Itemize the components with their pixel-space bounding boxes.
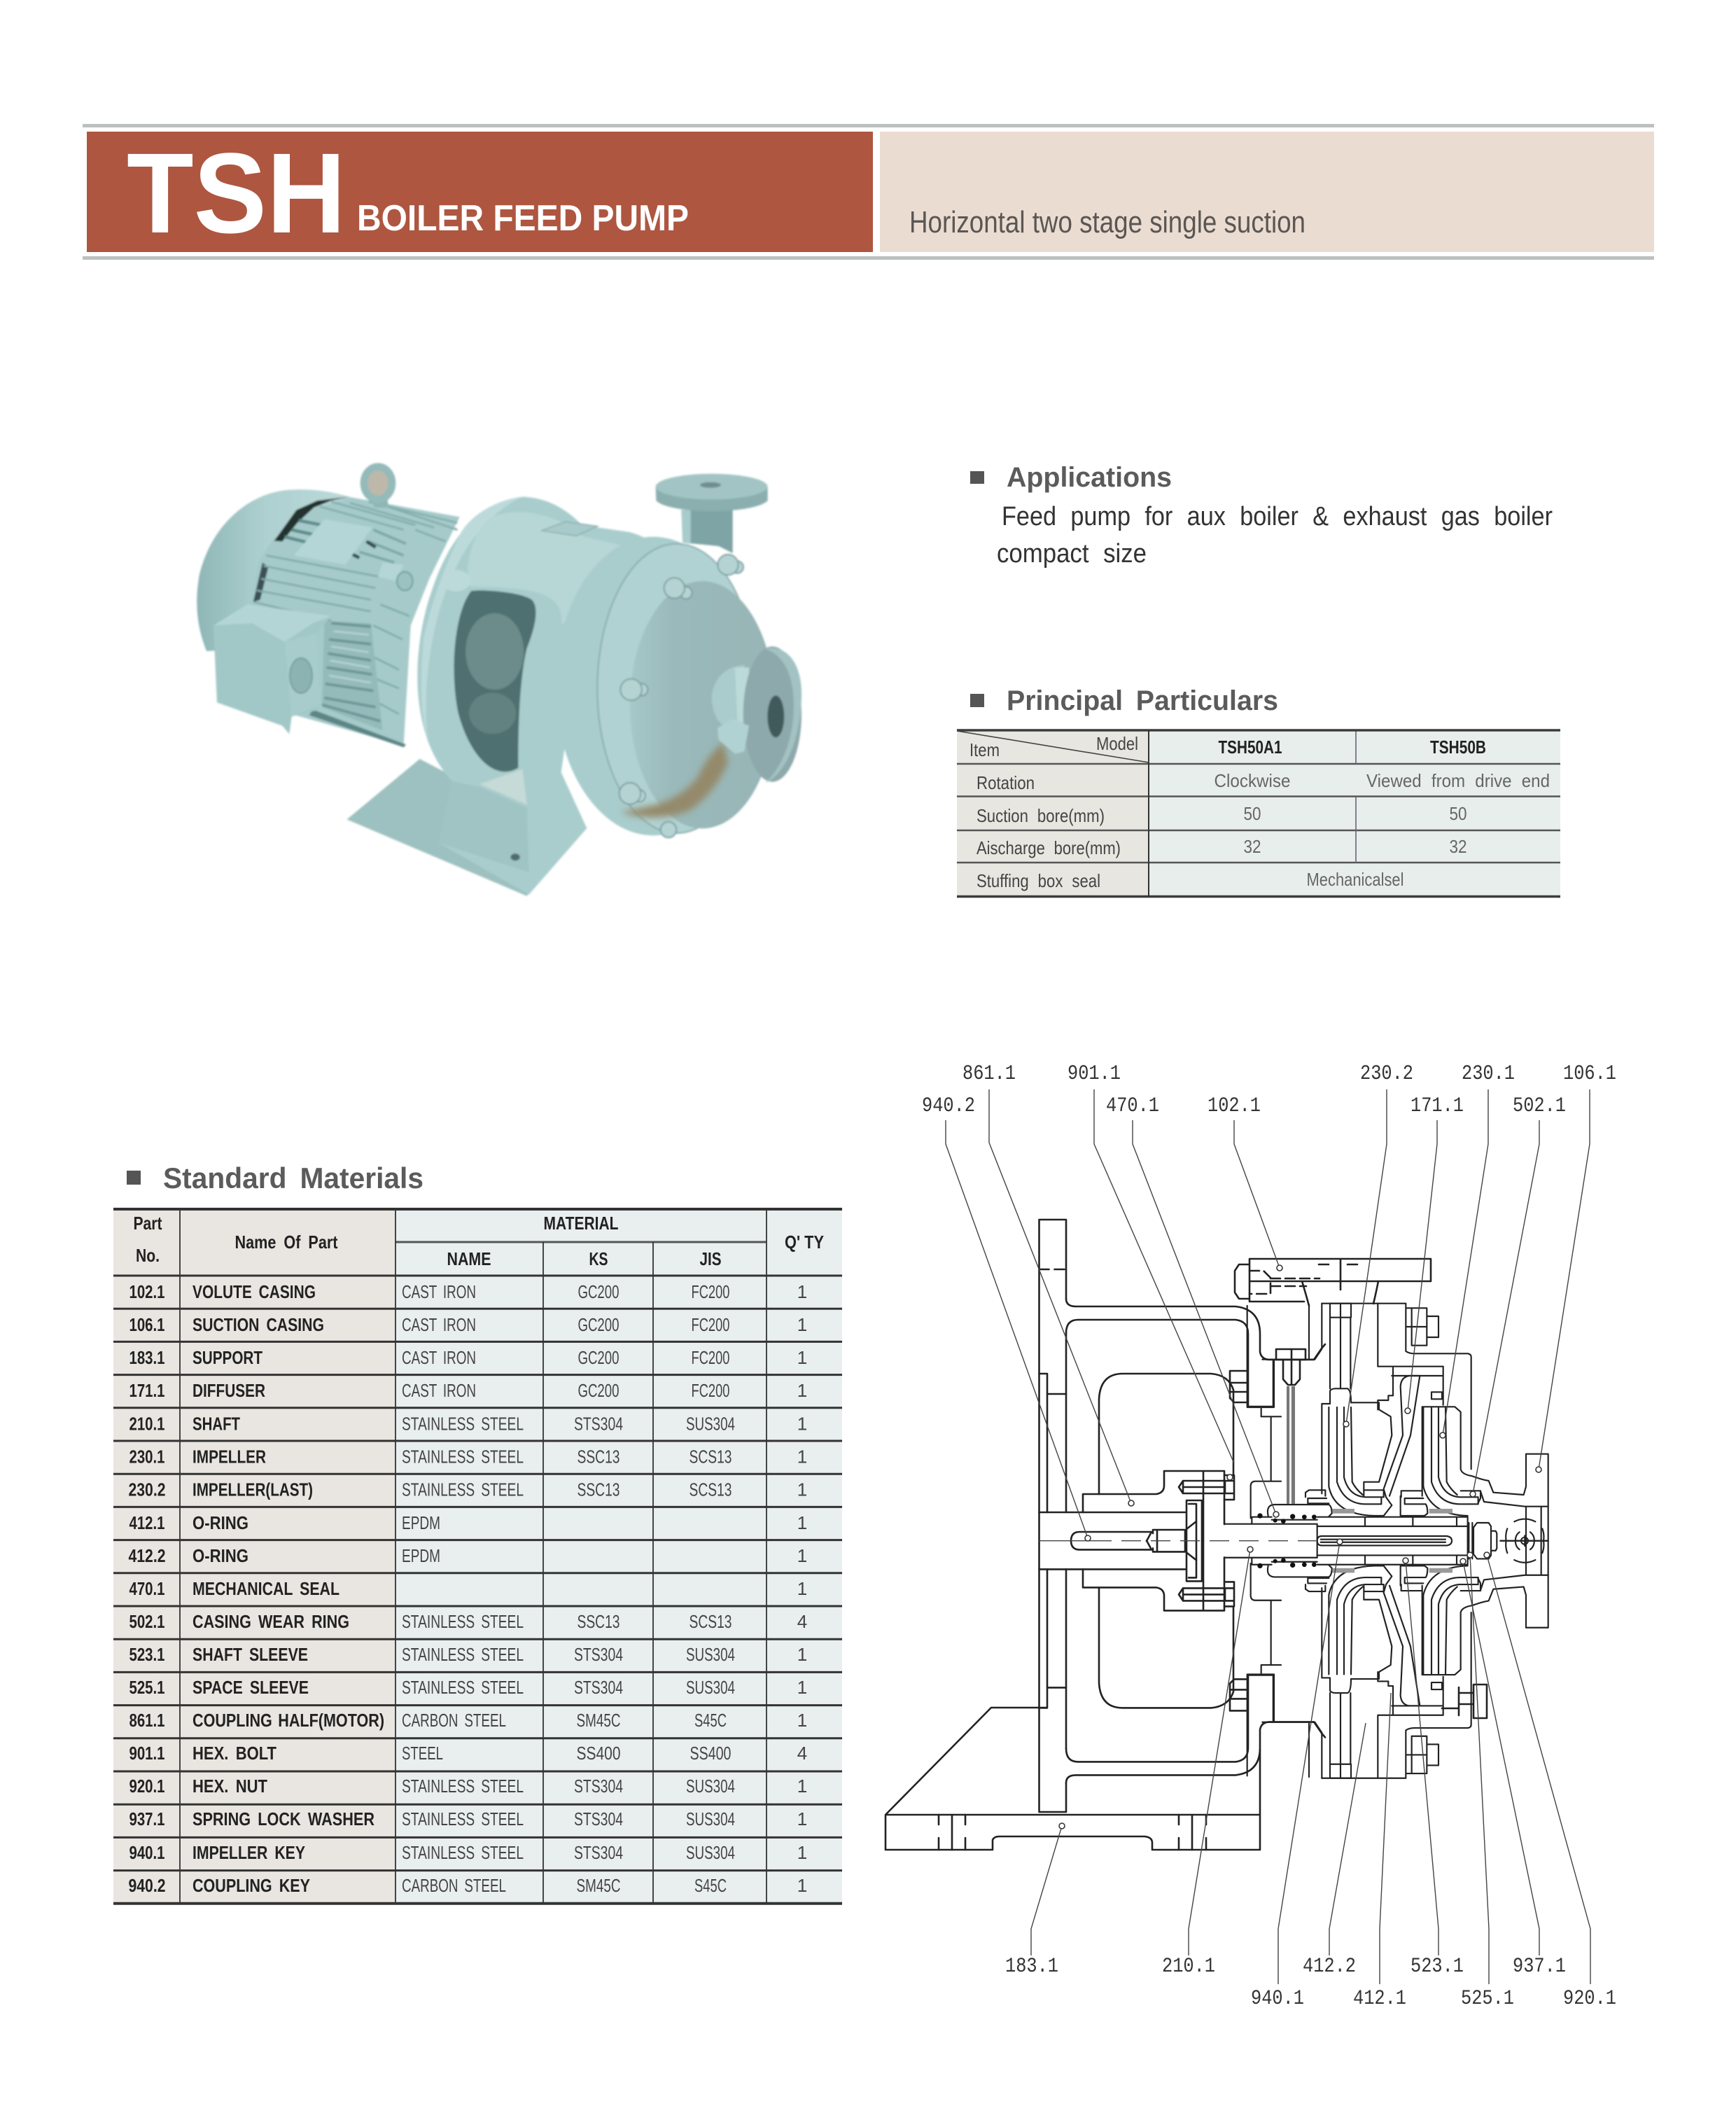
row 230.2: 230.2 (129, 1479, 165, 1500)
row 861.1: CARBON STEEL (402, 1710, 506, 1731)
table header: No. (136, 1245, 160, 1266)
row 412.2: O-RING (192, 1545, 248, 1566)
row 901.1: 901.1 (129, 1743, 165, 1764)
part number callouts: 183.1 (1005, 1955, 1058, 1979)
part number callouts: 106.1 (1563, 1062, 1616, 1086)
row 523.1: SUS304 (686, 1644, 735, 1665)
row 106.1: FC200 (692, 1314, 729, 1335)
table header row: TSH50B (1430, 737, 1486, 758)
row 937.1: STS304 (574, 1808, 623, 1829)
part number callouts: 525.1 (1461, 1987, 1514, 2011)
part number callouts: 230.2 (1360, 1062, 1413, 1086)
row 920.1: 920.1 (129, 1776, 165, 1797)
table header row: Model (1096, 733, 1138, 754)
row 940.1: IMPELLER KEY (192, 1842, 305, 1863)
volute casing (555, 537, 775, 837)
row 525.1: SPACE SLEEVE (192, 1677, 309, 1698)
row 940.1: 940.1 (129, 1842, 165, 1863)
row 937.1: 1 (797, 1808, 807, 1829)
row 230.1 (129, 1446, 807, 1467)
row 210.1: 210.1 (129, 1413, 165, 1434)
row 523.1: 1 (797, 1644, 807, 1665)
row 171.1: GC200 (578, 1380, 619, 1401)
row 102.1: VOLUTE CASING (192, 1281, 316, 1302)
row 920.1: 1 (797, 1776, 807, 1797)
row 920.1: SUS304 (686, 1776, 735, 1797)
standard materials table (113, 1209, 842, 1904)
row 106.1: SUCTION CASING (192, 1314, 324, 1335)
motor nameplate (294, 519, 372, 565)
row 210.1: STAINLESS STEEL (402, 1413, 524, 1434)
row: suction bore (976, 803, 1467, 826)
row 940.2: CARBON STEEL (402, 1875, 506, 1896)
row 171.1: 1 (797, 1380, 807, 1401)
heading: standard materials: Standard Materials (163, 1162, 424, 1194)
row 412.2 (129, 1545, 807, 1566)
title: TSH: TSH (127, 129, 346, 257)
row 920.1: HEX. NUT (192, 1776, 267, 1797)
header: red title panel (87, 132, 873, 252)
row 502.1: STAINLESS STEEL (402, 1611, 524, 1632)
row 230.1: SCS13 (689, 1446, 732, 1467)
row 470.1 (129, 1578, 807, 1599)
row 937.1: SPRING LOCK WASHER (192, 1808, 374, 1829)
motor (197, 467, 460, 747)
row 502.1: CASING WEAR RING (192, 1611, 349, 1632)
row: discharge bore: 32 (1243, 836, 1261, 857)
terminal box (214, 604, 331, 734)
row 937.1 (129, 1808, 807, 1829)
table header row (969, 733, 1486, 760)
row 102.1: CAST IRON (402, 1281, 476, 1302)
part number callouts: 102.1 (1208, 1094, 1261, 1118)
row 106.1: GC200 (578, 1314, 619, 1335)
applications text (997, 502, 1553, 569)
row 171.1: CAST IRON (402, 1380, 476, 1401)
row 937.1: SUS304 (686, 1808, 735, 1829)
row 183.1: SUPPORT (192, 1347, 262, 1368)
sectional drawing of pump (886, 1220, 1548, 1850)
row 920.1: STS304 (574, 1776, 623, 1797)
drawing: discharge top and rod (1235, 1259, 1431, 1504)
row 940.1: STAINLESS STEEL (402, 1842, 524, 1863)
row 940.1 (129, 1842, 807, 1863)
table header (133, 1213, 824, 1269)
part number callouts (922, 1062, 1616, 2011)
drawing: lower mirrored half (1039, 1540, 1548, 1783)
row 210.1 (129, 1413, 807, 1434)
row 502.1: 502.1 (129, 1611, 165, 1632)
part number callouts: 502.1 (1513, 1094, 1566, 1118)
row: stuffing box seal (976, 869, 1404, 891)
part number callouts: 412.1 (1353, 1987, 1406, 2011)
row 412.1 (129, 1512, 807, 1533)
row 861.1: 861.1 (129, 1710, 165, 1731)
heading: principal particulars: Principal Particulars (1007, 685, 1278, 716)
row: suction bore: Suction bore(mm) (976, 805, 1105, 826)
row: stuffing box seal: Mechanicalsel (1306, 869, 1404, 890)
principal particulars table (957, 730, 1560, 897)
drawing: base plate (886, 1708, 1260, 1850)
row 102.1: GC200 (578, 1281, 619, 1302)
row 901.1: SS400 (577, 1743, 620, 1764)
row 525.1: SUS304 (686, 1677, 735, 1698)
table header: NAME (447, 1248, 491, 1269)
row 102.1: 1 (797, 1281, 807, 1302)
row 171.1: 171.1 (129, 1380, 165, 1401)
suction nozzle (712, 646, 802, 783)
row 901.1 (129, 1743, 807, 1764)
table header row: Item (969, 739, 1000, 760)
row 525.1: 1 (797, 1677, 807, 1698)
part number callouts: 901.1 (1068, 1062, 1121, 1086)
row 525.1: STS304 (574, 1677, 623, 1698)
row 210.1: SUS304 (686, 1413, 735, 1434)
table header: Part (133, 1213, 162, 1234)
row 102.1: 102.1 (129, 1281, 165, 1302)
row: stuffing box seal: Stuffing box seal (976, 870, 1100, 891)
row 920.1: STAINLESS STEEL (402, 1776, 524, 1797)
row 861.1: S45C (694, 1710, 727, 1731)
row 901.1: HEX. BOLT (192, 1743, 276, 1764)
row 230.1: 1 (797, 1446, 807, 1467)
row 901.1: 4 (797, 1743, 807, 1764)
row 102.1 (129, 1281, 807, 1302)
applications text: compact size (997, 539, 1147, 569)
part number callouts: 210.1 (1162, 1955, 1215, 1979)
row 920.1 (129, 1776, 807, 1797)
pump photo illustration (197, 467, 802, 896)
window opening (454, 590, 536, 772)
row: discharge bore: 32 (1449, 836, 1467, 857)
row 230.1: IMPELLER (192, 1446, 266, 1467)
row 171.1 (129, 1380, 807, 1401)
row 210.1: 1 (797, 1413, 807, 1434)
row 106.1 (129, 1314, 807, 1335)
row: rotation: Viewed from drive end (1366, 770, 1550, 791)
table header: JIS (700, 1248, 721, 1269)
header band (83, 124, 1654, 260)
part number callouts: 940.1 (1251, 1987, 1304, 2011)
drawing: lower right bolt (1442, 1685, 1487, 1718)
row 412.2: 1 (797, 1545, 807, 1566)
row 940.1: SUS304 (686, 1842, 735, 1863)
part number callouts: 171.1 (1410, 1094, 1464, 1118)
row 525.1 (129, 1677, 807, 1698)
leader lines (946, 1089, 1590, 1984)
row 940.2: S45C (694, 1875, 727, 1896)
row: rotation: Clockwise (1214, 770, 1291, 791)
row: suction bore: 50 (1243, 803, 1261, 824)
row 502.1: SCS13 (689, 1611, 732, 1632)
row 502.1: 4 (797, 1611, 807, 1632)
row 937.1: 937.1 (129, 1808, 165, 1829)
table header: Q' TY (785, 1232, 824, 1253)
row 470.1: 1 (797, 1578, 807, 1599)
table header row: TSH50A1 (1218, 737, 1282, 758)
drawing: support flange and center line (1039, 1220, 1528, 1812)
row 901.1: STEEL (402, 1743, 443, 1764)
table header: Name Of Part (235, 1232, 338, 1253)
row 106.1: 1 (797, 1314, 807, 1335)
row 861.1: 1 (797, 1710, 807, 1731)
coupling (465, 613, 524, 690)
drawing: mirrored half of section (1039, 1299, 1548, 1541)
row 210.1: STS304 (574, 1413, 623, 1434)
row 940.2: 1 (797, 1875, 807, 1896)
table header: KS (589, 1248, 608, 1269)
row 940.2: 940.2 (129, 1875, 165, 1896)
row: discharge bore: Aischarge bore(mm) (976, 837, 1121, 858)
row 106.1: 106.1 (129, 1314, 165, 1335)
row 171.1: FC200 (692, 1380, 729, 1401)
row 171.1: DIFFUSER (192, 1380, 265, 1401)
title: boiler feed pump: BOILER FEED PUMP (357, 198, 689, 239)
row 230.2: SSC13 (577, 1479, 620, 1500)
row 525.1: STAINLESS STEEL (402, 1677, 524, 1698)
row 183.1: 1 (797, 1347, 807, 1368)
row 523.1: 523.1 (129, 1644, 165, 1665)
row 412.1: O-RING (192, 1512, 248, 1533)
row 183.1: 183.1 (129, 1347, 165, 1368)
part number callouts: 412.2 (1303, 1955, 1356, 1979)
row 412.1: 412.1 (129, 1512, 165, 1533)
part number callouts: 470.1 (1106, 1094, 1159, 1118)
header: beige subtitle panel (880, 132, 1654, 252)
row 230.2: SCS13 (689, 1479, 732, 1500)
row 470.1: 470.1 (129, 1578, 165, 1599)
row 183.1: FC200 (692, 1347, 729, 1368)
row 230.1: 230.1 (129, 1446, 165, 1467)
row 230.2 (129, 1479, 807, 1500)
row 210.1: SHAFT (192, 1413, 240, 1434)
row: rotation: Rotation (976, 772, 1035, 793)
applications text: Feed pump for aux boiler & exhaust gas boiler (1002, 502, 1553, 531)
part number callouts: 940.2 (922, 1094, 975, 1118)
part number callouts: 861.1 (962, 1062, 1016, 1086)
row 523.1: SHAFT SLEEVE (192, 1644, 308, 1665)
row 230.1: STAINLESS STEEL (402, 1446, 524, 1467)
row: discharge bore (976, 836, 1467, 858)
lifting eye (364, 467, 392, 508)
row 106.1: CAST IRON (402, 1314, 476, 1335)
row 523.1: STAINLESS STEEL (402, 1644, 524, 1665)
row 940.2 (129, 1875, 807, 1896)
part number callouts: 523.1 (1410, 1955, 1464, 1979)
row 861.1: COUPLING HALF(MOTOR) (192, 1710, 384, 1731)
motor end cap (197, 489, 350, 651)
table header: MATERIAL (543, 1213, 619, 1234)
row 940.1: STS304 (574, 1842, 623, 1863)
row 412.2: 412.2 (129, 1545, 165, 1566)
row 523.1 (129, 1644, 807, 1665)
row 412.1: 1 (797, 1512, 807, 1533)
row 861.1: SM45C (577, 1710, 620, 1731)
row 502.1: SSC13 (577, 1611, 620, 1632)
row 502.1 (129, 1611, 807, 1632)
row: rotation (976, 770, 1550, 793)
subtitle: Horizontal two stage single suction (909, 205, 1306, 239)
row 861.1 (129, 1710, 807, 1731)
row 940.2: SM45C (577, 1875, 620, 1896)
row 523.1: STS304 (574, 1644, 623, 1665)
row 183.1: CAST IRON (402, 1347, 476, 1368)
row 230.2: 1 (797, 1479, 807, 1500)
row 940.2: COUPLING KEY (192, 1875, 310, 1896)
row 412.2: EPDM (402, 1545, 440, 1566)
row 183.1: GC200 (578, 1347, 619, 1368)
row 230.2: STAINLESS STEEL (402, 1479, 524, 1500)
row: suction bore: 50 (1449, 803, 1467, 824)
row 102.1: FC200 (692, 1281, 729, 1302)
motor finned body (250, 496, 460, 747)
discharge nozzle (656, 474, 768, 553)
row 901.1: SS400 (690, 1743, 731, 1764)
row 525.1: 525.1 (129, 1677, 165, 1698)
row 937.1: STAINLESS STEEL (402, 1808, 524, 1829)
row 230.2: IMPELLER(LAST) (192, 1479, 313, 1500)
row 230.1: SSC13 (577, 1446, 620, 1467)
casing bolts (620, 555, 743, 837)
part number callouts: 937.1 (1513, 1955, 1566, 1979)
bracket housing and base (346, 496, 657, 896)
part number callouts: 230.1 (1462, 1062, 1515, 1086)
row 183.1 (129, 1347, 807, 1368)
row 470.1: MECHANICAL SEAL (192, 1578, 340, 1599)
row 940.1: 1 (797, 1842, 807, 1863)
part number callouts: 920.1 (1563, 1987, 1616, 2011)
row 412.1: EPDM (402, 1512, 440, 1533)
heading: applications: Applications (1007, 462, 1172, 493)
